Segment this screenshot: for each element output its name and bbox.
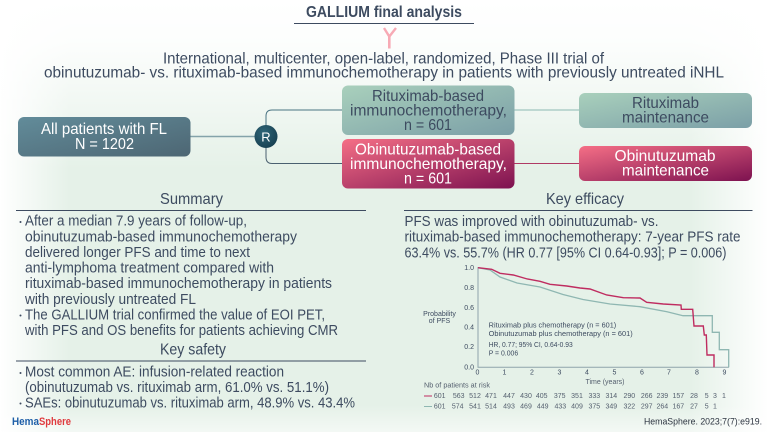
risk row: rituximab: 27 [690,404,698,410]
box: rituximab maintenance: Rituximab [632,95,699,112]
risk row: obinutuzumab: 28 [690,393,698,400]
summary text: delivered longer PFS and time to next [25,244,251,261]
risk row: rituximab: 449 [537,404,549,410]
risk row: rituximab: 1 [713,404,717,410]
risk row: obinutuzumab: 375 [554,393,566,400]
x axis tick labels: 0 [476,370,480,376]
summary text: rituximab-based immunochemotherapy in patients [25,275,332,292]
chart legend and statistics: HR, 0.77; 95% CI, 0.64-0.93 [489,342,573,349]
key safety text: (obinutuzumab vs. rituximab arm, 61.0% vs. 51.1%) [25,379,329,396]
key safety text: Most common AE: infusion-related reaction [25,364,284,381]
risk row: obinutuzumab: 3 [713,393,717,400]
chart axes [478,267,729,367]
logo: HemaSphere [12,416,71,428]
key safety text [20,364,355,411]
box: rituximab immunochemotherapy: n = 601 [404,117,452,134]
box: rituximab immunochemotherapy [342,86,514,135]
key safety text: SAEs: obinutuzumab vs. rituximab arm, 48.9% vs. 43.4% [25,394,355,411]
summary text: The GALLIUM trial confirmed the value of EOI PET, [25,306,325,323]
risk row: rituximab: 601 [434,404,446,410]
risk row: obinutuzumab: 157 [672,393,684,400]
summary text: with PFS and OS benefits for patients achieving CMR [24,322,338,339]
risk row: obinutuzumab: 563 [453,393,465,400]
y axis tick labels: 0.8 [464,285,474,292]
title: GALLIUM final analysis [306,4,462,21]
box: rituximab maintenance [579,93,752,128]
risk row: obinutuzumab: 5 [705,393,709,400]
y axis tick labels [464,265,474,372]
x axis tick labels: 4 [585,370,589,376]
summary text: with previously untreated FL [24,291,196,308]
y axis title: Probability [423,311,456,318]
x axis tick labels [476,370,727,376]
y axis tick labels: 0.2 [464,344,474,351]
x axis title: Time (years) [585,379,625,386]
box: rituximab maintenance: maintenance [622,110,709,126]
risk row: obinutuzumab: 333 [588,393,600,400]
x axis tick labels: 3 [558,370,562,376]
risk row: rituximab: 264 [656,404,668,410]
box: all patients: All patients with FL [41,121,167,138]
risk row: obinutuzumab: 405 [536,393,548,400]
x axis tick labels: 1 [503,370,507,376]
box: all patients: N = 1202 [75,136,134,153]
box: obinutuzumab immunochemotherapy: Obinutuzumab-based [355,142,501,158]
box: rituximab immunochemotherapy: Rituximab-based [372,88,484,105]
box: obinutuzumab maintenance: Obinutuzumab [614,148,716,165]
y axis tick labels: 0.4 [464,324,474,332]
randomization circle [254,125,278,148]
risk row: obinutuzumab: 512 [469,393,481,400]
risk row: obinutuzumab: 314 [605,393,617,400]
chart: Kaplan-Meier PFS curves [423,265,729,386]
risk row: obinutuzumab: 601 [434,393,446,400]
risk row: rituximab: 375 [588,404,600,410]
chart legend and statistics: P = 0.006 [489,350,518,358]
risk row: rituximab: 409 [571,404,583,410]
box: obinutuzumab immunochemotherapy: n = 601 [404,170,452,188]
icon: antibody [384,28,396,48]
risk row: obinutuzumab: 471 [485,393,497,400]
x axis tick labels: 7 [667,370,671,376]
randomization circle: R [261,130,271,144]
summary text: obinutuzumab-based immunochemotherapy [25,228,297,245]
chart legend and statistics: Obinutuzumab plus chemotherapy (n = 601) [489,331,633,338]
risk row: rituximab: 514 [485,404,497,410]
summary heading: Summary [160,191,223,208]
box: rituximab immunochemotherapy: immunochemotherapy, [350,102,507,120]
box: obinutuzumab immunochemotherapy [342,139,514,188]
curve: obinutuzumab [478,268,714,367]
risk row: rituximab: 349 [605,404,617,410]
risk row: rituximab: 5 [705,404,709,410]
box: obinutuzumab maintenance [579,146,752,181]
risk row: rituximab: 433 [554,404,566,410]
risk row: obinutuzumab [424,393,726,400]
logo: HemaSphere: Sphere [39,416,71,428]
risk row: obinutuzumab: 447 [503,393,515,400]
table: patients at risk [424,383,726,410]
summary text: After a median 7.9 years of follow-up, [25,213,247,230]
y axis tick labels: 0.0 [464,364,474,372]
key efficacy text: PFS was improved with obinutuzumab- vs. [404,213,658,230]
x axis tick labels: 2 [530,370,534,376]
logo: HemaSphere: Hema [12,416,40,428]
summary text: anti-lymphoma treatment compared with [25,260,274,277]
y axis tick labels: 1.0 [464,265,474,272]
box: obinutuzumab maintenance: maintenance [622,162,709,180]
y axis title [423,311,456,325]
chart legend and statistics: Rituximab plus chemotherapy (n = 601) [489,323,616,330]
risk row: obinutuzumab: 266 [641,393,653,400]
summary text [20,213,338,339]
y axis tick labels: 0.6 [464,305,474,312]
curve: rituximab [478,268,729,367]
risk row: rituximab: 493 [503,404,515,410]
box: all patients [18,117,190,156]
risk row: rituximab: 574 [452,404,464,410]
table: patients at risk: Nb of patients at risk [424,383,491,390]
risk row: rituximab: 322 [623,404,635,410]
x axis tick labels: 8 [695,370,699,376]
key efficacy heading: Key efficacy [546,191,624,208]
key efficacy text [404,213,740,261]
risk row: rituximab: 167 [672,404,684,410]
trial description: International, multicenter, open-label, randomized, Phase III trial of [163,50,605,68]
risk row: rituximab: 541 [469,404,481,410]
key safety heading: Key safety [160,342,226,358]
x axis tick labels: 6 [640,370,644,376]
trial description [44,50,724,82]
risk row: rituximab: 297 [641,404,653,410]
x axis tick labels: 5 [613,370,617,376]
risk row: obinutuzumab: 1 [722,393,726,400]
risk row: obinutuzumab: 430 [520,393,532,400]
y axis title: of PFS [429,318,451,325]
chart legend and statistics [489,323,633,358]
risk row: rituximab: 469 [520,404,532,410]
risk row: obinutuzumab: 239 [656,393,668,400]
trial description: obinutuzumab- vs. rituximab-based immunochemotherapy in patients with previously untreated iNHL [44,64,724,82]
risk row: obinutuzumab: 351 [571,393,583,400]
connector lines [190,110,579,164]
risk row: rituximab [424,404,717,410]
box: obinutuzumab immunochemotherapy: immunochemotherapy, [350,156,507,173]
risk row: obinutuzumab: 290 [623,393,635,400]
x axis tick labels: 9 [723,370,727,376]
